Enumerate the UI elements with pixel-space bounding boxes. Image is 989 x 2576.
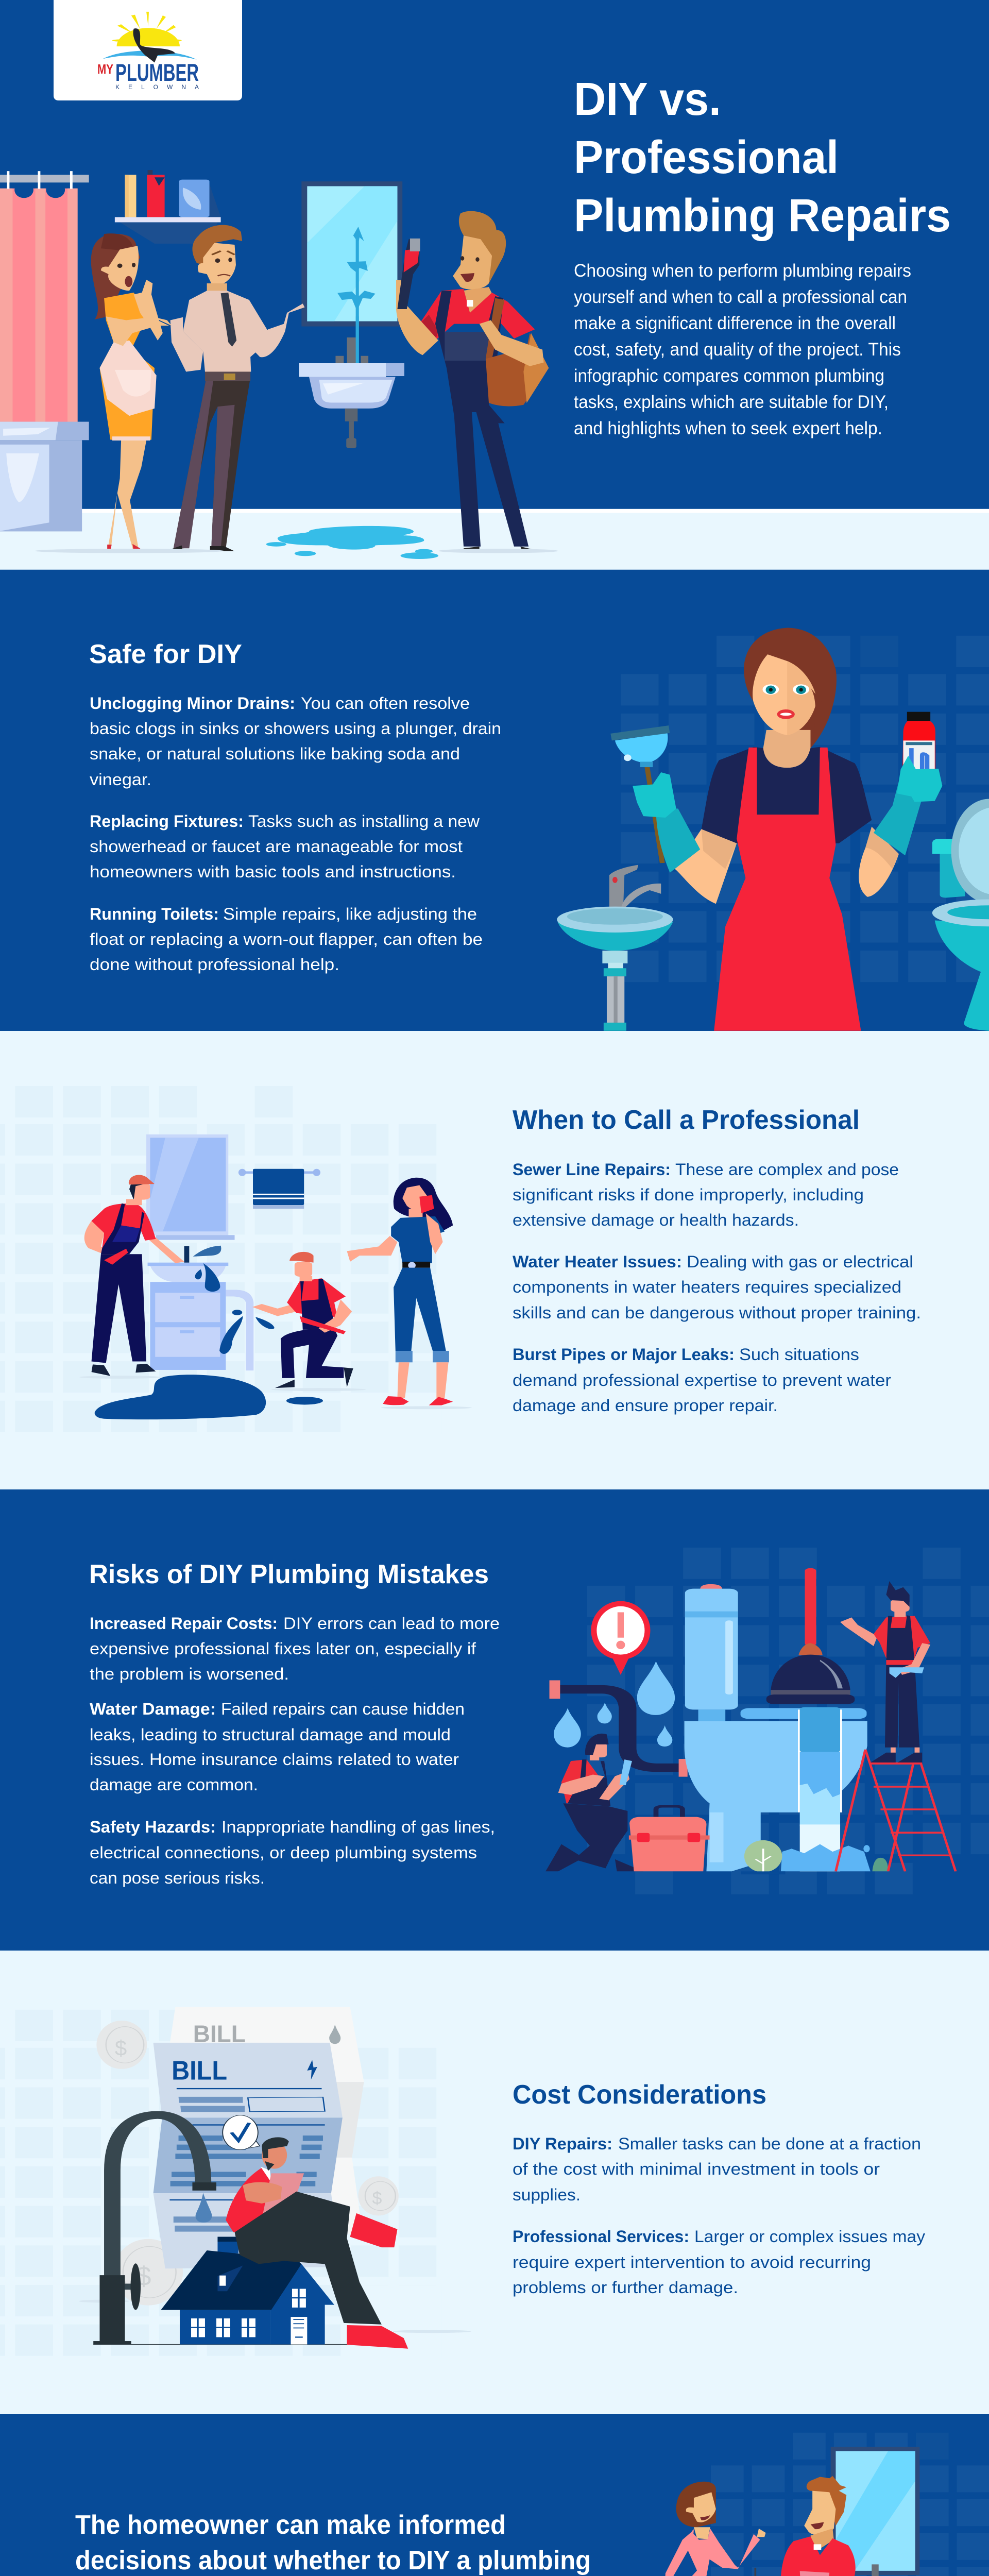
title: DIY vs. bbox=[574, 74, 721, 125]
intro paragraph bbox=[574, 261, 911, 438]
woman on phone bbox=[347, 1178, 472, 1409]
list: when to call a professional: damage and ensure proper repair. bbox=[513, 1396, 778, 1415]
back bill sheet: BILL bbox=[193, 2021, 246, 2047]
list: cost considerations: DIY Repairs: bbox=[513, 2134, 612, 2153]
intro paragraph: Choosing when to perform plumbing repairs bbox=[574, 261, 911, 281]
list: when to call a professional: demand professional expertise to prevent water bbox=[513, 1371, 891, 1389]
list: cost considerations: supplies. bbox=[513, 2185, 581, 2204]
list: DIY risks bbox=[90, 1614, 500, 1887]
list: DIY risks: DIY errors can lead to more bbox=[283, 1614, 500, 1633]
list: DIY risks: damage are common. bbox=[90, 1775, 258, 1794]
sink bbox=[837, 2564, 927, 2576]
list: DIY-safe tasks: Simple repairs, like adjusting the bbox=[223, 905, 477, 923]
cracked pipe bbox=[550, 1680, 688, 1777]
panel: safe for DIY bbox=[0, 570, 989, 1031]
intro paragraph: cost, safety, and quality of the project. This bbox=[574, 340, 901, 360]
list: DIY-safe tasks: Tasks such as installing a new bbox=[248, 812, 480, 831]
list: when to call a professional: components in water heaters requires specialized bbox=[513, 1278, 901, 1296]
list: when to call a professional: Such situations bbox=[739, 1345, 859, 1364]
plunger bbox=[766, 1568, 855, 1704]
house bbox=[161, 2237, 334, 2344]
toolbox bbox=[629, 1806, 710, 1871]
intro paragraph: yourself and when to call a professional can bbox=[574, 287, 907, 307]
list: DIY-safe tasks bbox=[90, 694, 501, 974]
water drops bbox=[554, 1661, 675, 1748]
title bbox=[574, 74, 951, 242]
list: DIY risks: Failed repairs can cause hidden bbox=[221, 1700, 465, 1718]
cleaner bottle in gloved hand bbox=[874, 712, 942, 855]
man in red sweater with clipboard bbox=[748, 2476, 856, 2576]
kneeling plumber bbox=[252, 1252, 366, 1391]
kneeling plumber bbox=[545, 1734, 643, 1871]
list: cost considerations: problems or further damage. bbox=[513, 2278, 738, 2297]
conclusion text: The homeowner can make informed bbox=[75, 2510, 506, 2540]
woman in red apron bbox=[675, 628, 899, 1031]
hero illustration: bathroom with couple and plumber bbox=[0, 170, 989, 570]
logo card: PLUMBER bbox=[115, 59, 199, 86]
red ladder bbox=[835, 1750, 956, 1871]
logo card bbox=[54, 0, 242, 100]
list: DIY-safe tasks: Unclogging Minor Drains: bbox=[90, 694, 295, 713]
list: DIY risks: can pose serious risks. bbox=[90, 1869, 265, 1887]
list: cost considerations: of the cost with minimal investment in tools or bbox=[513, 2160, 880, 2178]
washbasin and faucet bbox=[557, 865, 673, 1031]
checkmark speech bubble bbox=[223, 2115, 260, 2150]
coins: $ bbox=[115, 2036, 127, 2060]
plumber with wrench and bag bbox=[396, 211, 549, 551]
list: when to call a professional: Burst Pipes or Major Leaks: bbox=[513, 1345, 735, 1364]
mirror bbox=[831, 2447, 919, 2575]
list: DIY risks: expensive professional fixes later on, especially if bbox=[90, 1639, 476, 1658]
list: DIY risks: Safety Hazards: bbox=[90, 1818, 216, 1836]
list: DIY risks: Inappropriate handling of gas lines, bbox=[221, 1818, 495, 1836]
list: DIY-safe tasks: Replacing Fixtures: bbox=[90, 812, 244, 831]
list: DIY-safe tasks: You can often resolve bbox=[301, 694, 470, 713]
front bill sheet bbox=[154, 2043, 343, 2268]
illustration: woman with plunger and cleaner bbox=[557, 628, 989, 1031]
list: when to call a professional: extensive damage or health hazards. bbox=[513, 1211, 799, 1229]
panel: risks of DIY plumbing mistakes bbox=[0, 1489, 989, 1951]
illustration: overflowing toilet with plumbers bbox=[545, 1548, 989, 1894]
coins: $ bbox=[372, 2189, 382, 2208]
list: DIY-safe tasks: homeowners with basic tools and instructions. bbox=[90, 862, 456, 881]
floor shadows and water puddle bbox=[35, 526, 558, 559]
back bill sheet bbox=[164, 2007, 364, 2234]
title: Professional bbox=[574, 132, 839, 183]
list: cost considerations: Professional Services: bbox=[513, 2227, 689, 2246]
list: cost considerations: Smaller tasks can be done at a fraction bbox=[618, 2134, 921, 2153]
list: DIY-safe tasks: vinegar. bbox=[90, 770, 151, 789]
list: when to call a professional: significant risks if done improperly, including bbox=[513, 1185, 864, 1204]
panel: conclusion bbox=[0, 2414, 989, 2576]
list: DIY-safe tasks: basic clogs in sinks or showers using a plunger, drain bbox=[90, 719, 501, 738]
list: DIY-safe tasks: showerhead or faucet are manageable for most bbox=[90, 837, 463, 856]
conclusion text bbox=[75, 2510, 591, 2576]
coins bbox=[96, 2021, 399, 2306]
mirror with water spray bbox=[301, 181, 402, 364]
heading: When to Call a Professional: When to Call a Professional bbox=[513, 1105, 860, 1135]
shower curtain and bathtub bbox=[0, 171, 89, 531]
man reading bill bbox=[226, 2137, 408, 2349]
panel: cost considerations bbox=[0, 1951, 989, 2414]
illustration: plumber talking with homeowner bbox=[663, 2433, 989, 2576]
foam and plants bbox=[741, 1840, 888, 1874]
plunger in gloved hand bbox=[610, 725, 700, 873]
shelf with bottles bbox=[115, 170, 221, 244]
woman in pink top bbox=[663, 2482, 766, 2576]
list: DIY risks: leaks, leading to structural damage and mould bbox=[90, 1725, 451, 1744]
logo card: KELOWNA bbox=[115, 83, 199, 91]
list: when to call a professional: Dealing with gas or electrical bbox=[687, 1252, 913, 1271]
vanity with leaking faucet and pipe bbox=[148, 1246, 275, 1370]
intro paragraph: and highlights when to seek expert help. bbox=[574, 418, 882, 438]
list: DIY risks: Increased Repair Costs: bbox=[90, 1614, 278, 1633]
illustration: plumbers fixing leak with homeowner bbox=[0, 1086, 472, 1434]
list: DIY-safe tasks: snake, or natural solutions like baking soda and bbox=[90, 744, 460, 763]
panel: when to call a professional bbox=[0, 1031, 989, 1489]
list: DIY risks: Water Damage: bbox=[90, 1700, 216, 1718]
panel: hero bbox=[0, 0, 989, 570]
plumber on ladder bbox=[840, 1581, 930, 1762]
heading: Cost Considerations: Cost Considerations bbox=[513, 2080, 766, 2110]
intro paragraph: make a significant difference in the overall bbox=[574, 313, 896, 333]
standing plumber bbox=[79, 1175, 184, 1379]
water puddle on floor bbox=[95, 1375, 323, 1419]
list: when to call a professional: Water Heater Issues: bbox=[513, 1252, 682, 1271]
heading: Safe for DIY: Safe for DIY bbox=[89, 639, 242, 669]
intro paragraph: infographic compares common plumbing bbox=[574, 366, 884, 386]
list: DIY risks: the problem is worsened. bbox=[90, 1665, 289, 1683]
heading: Risks of DIY Plumbing Mistakes: Risks of DIY Plumbing Mistakes bbox=[89, 1560, 489, 1589]
list: DIY risks: electrical connections, or deep plumbing systems bbox=[90, 1843, 477, 1862]
worried man with tie bbox=[151, 225, 304, 551]
list: DIY-safe tasks: Running Toilets: bbox=[90, 905, 219, 923]
list: cost considerations: require expert intervention to avoid recurring bbox=[513, 2253, 871, 2272]
list: when to call a professional: skills and can be dangerous without proper training. bbox=[513, 1303, 921, 1322]
front bill sheet: BILL bbox=[172, 2056, 227, 2086]
list: cost considerations bbox=[513, 2134, 926, 2297]
toilet bbox=[932, 799, 989, 1031]
list: DIY-safe tasks: float or replacing a worn-out flapper, can often be bbox=[90, 930, 483, 948]
alert bubble bbox=[591, 1601, 650, 1675]
toilet bbox=[685, 1584, 867, 1871]
list: when to call a professional: These are complex and pose bbox=[675, 1160, 899, 1179]
illustration: man on house with bills and faucet bbox=[0, 2007, 471, 2358]
list: cost considerations: Larger or complex issues may bbox=[694, 2227, 926, 2246]
list: when to call a professional: Sewer Line Repairs: bbox=[513, 1160, 671, 1179]
worried woman bbox=[91, 233, 169, 551]
intro paragraph: tasks, explains which are suitable for DIY, bbox=[574, 392, 889, 412]
list: when to call a professional bbox=[513, 1160, 921, 1415]
conclusion text: decisions about whether to DIY a plumbing bbox=[75, 2546, 591, 2575]
title: Plumbing Repairs bbox=[574, 190, 951, 242]
sink bbox=[299, 316, 404, 448]
mirror and towel bbox=[146, 1134, 320, 1240]
list: DIY-safe tasks: done without professional help. bbox=[90, 955, 339, 974]
coins: $ bbox=[136, 2261, 151, 2291]
logo card: MY bbox=[97, 61, 113, 77]
list: DIY risks: issues. Home insurance claims related to water bbox=[90, 1750, 459, 1769]
faucet with drip bbox=[93, 2115, 355, 2345]
